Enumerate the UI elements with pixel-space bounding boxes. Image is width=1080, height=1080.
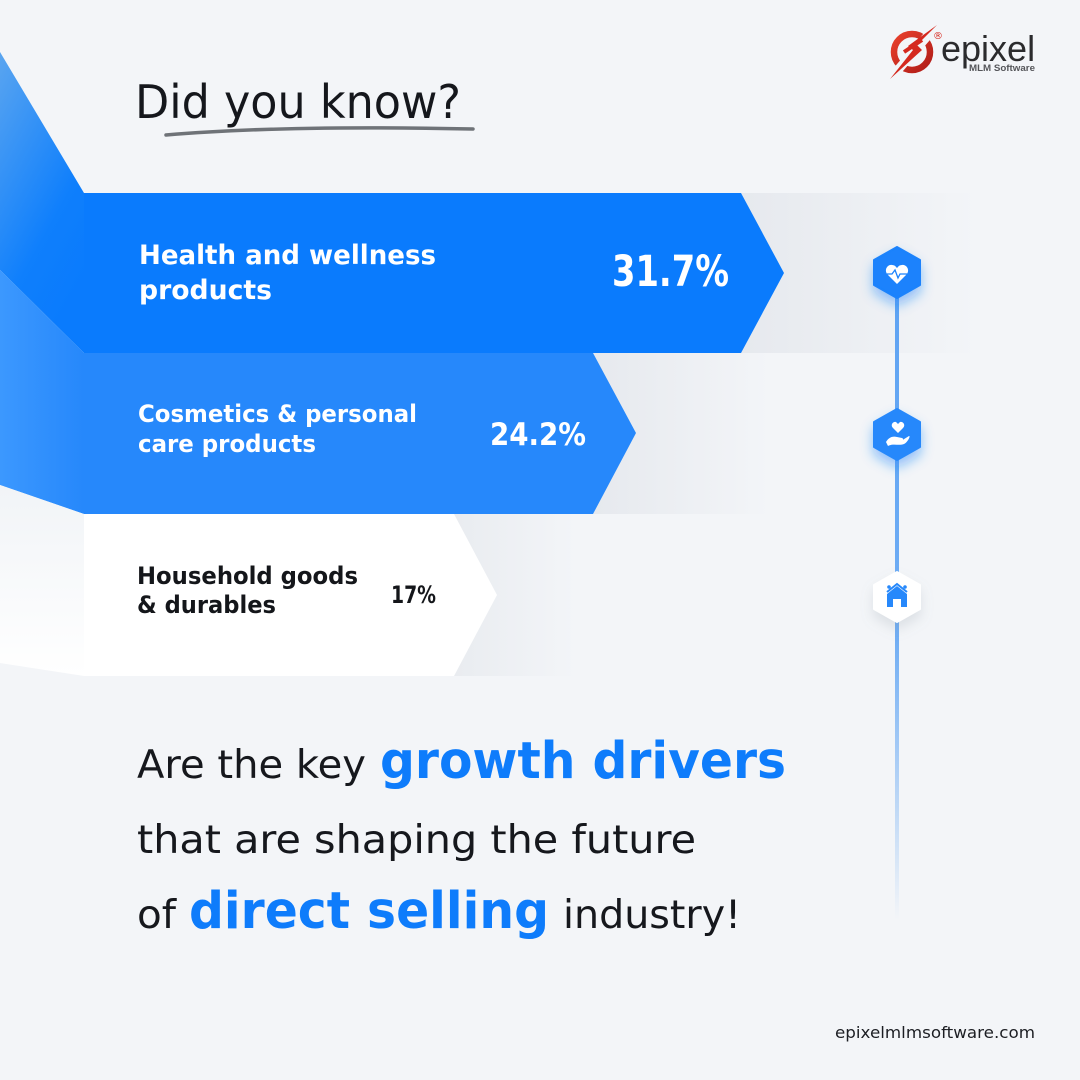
closing statement: growth drivers <box>380 732 786 791</box>
closing statement: industry! <box>563 893 741 938</box>
value: 31.7%: 31.7% <box>612 247 729 297</box>
label: cosmetics and personal care products: Cosmetics & personal <box>138 400 417 428</box>
icon: house <box>874 572 920 622</box>
closing statement: Are the key <box>137 743 366 788</box>
label: household goods and durables: Household goods <box>137 562 358 590</box>
closing statement: that are shaping the future <box>137 818 696 863</box>
panel: left folds <box>0 52 84 676</box>
logo: epixel MLM Software <box>890 25 1035 79</box>
bar shadows <box>454 193 977 676</box>
logo: epixel MLM Software: ® <box>933 31 943 42</box>
panel: household bar <box>84 514 497 676</box>
closing statement: of <box>137 893 177 938</box>
label: health and wellness products: Health and wellness <box>139 240 436 271</box>
label: cosmetics and personal care products: care products <box>138 430 316 458</box>
value: 17%: 17% <box>391 581 436 609</box>
panel: health and wellness bar <box>84 193 784 353</box>
closing statement: direct selling <box>189 882 549 941</box>
icon: heart in hand <box>874 409 920 460</box>
closing statement <box>137 732 786 941</box>
website url: epixelmlmsoftware.com <box>835 1023 1035 1042</box>
logo: epixel MLM Software: MLM Software <box>969 63 1035 73</box>
logo: epixel MLM Software: epixel <box>941 28 1035 69</box>
panel: cosmetics bar <box>84 353 636 514</box>
value: 24.2%: 24.2% <box>490 417 586 453</box>
title: Did you know? <box>135 75 461 129</box>
label: household goods and durables: & durables <box>137 591 276 619</box>
timeline line <box>895 290 899 920</box>
label: health and wellness products: products <box>139 275 272 306</box>
icon: heart pulse <box>874 247 920 298</box>
